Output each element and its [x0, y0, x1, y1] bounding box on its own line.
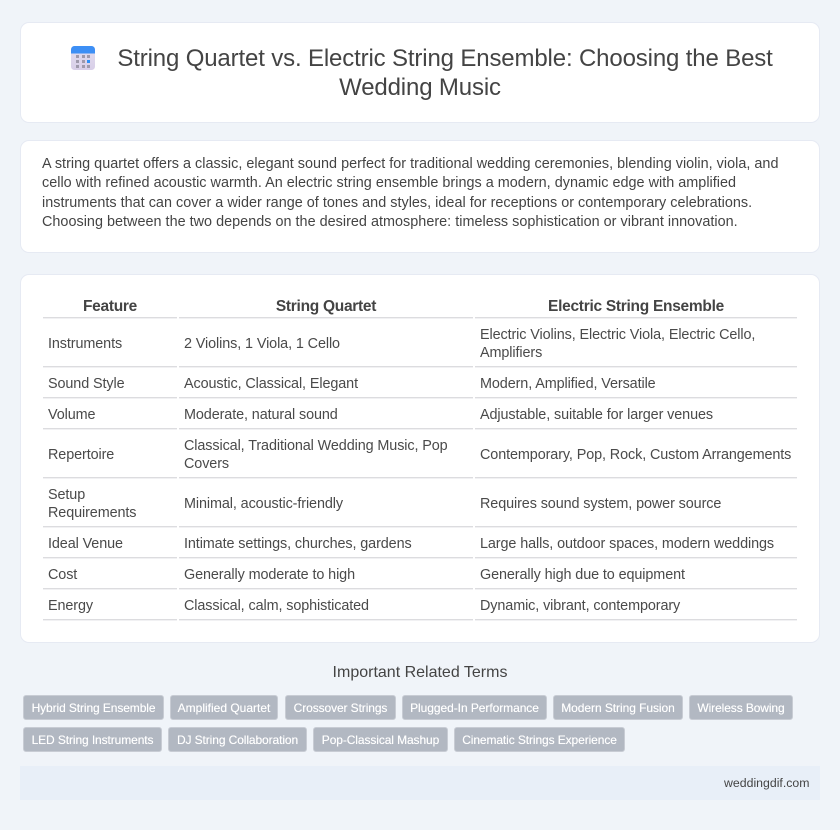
- table rows: Setup: [48, 487, 85, 503]
- table header: Feature: [83, 298, 137, 315]
- panel: comparison table: [20, 274, 820, 643]
- table rows: Covers: [184, 456, 229, 472]
- heading: related terms: Important Related Terms: [333, 664, 507, 681]
- table rows: [43, 317, 797, 621]
- table rows: Generally high due to equipment: [480, 567, 685, 583]
- panel: introduction: [20, 140, 820, 253]
- table rows: Large halls, outdoor spaces, modern weddings: [480, 536, 774, 552]
- tags: related terms: Plugged-In Performance: [410, 701, 539, 715]
- tags: related terms: Hybrid String Ensemble: [32, 701, 155, 715]
- tags: related terms: Cinematic Strings Experience: [462, 733, 617, 747]
- table rows: Requirements: [48, 505, 136, 521]
- table rows: Instruments: [48, 336, 122, 352]
- panel: header: [20, 22, 820, 123]
- footer: [20, 766, 820, 800]
- table rows: Ideal Venue: [48, 536, 123, 552]
- table header: [83, 298, 724, 315]
- tags: related terms: Crossover Strings: [294, 701, 387, 715]
- table rows: Cost: [48, 567, 77, 583]
- table rows: Amplifiers: [480, 345, 542, 361]
- text block: introduction: A string quartet offers a classic, elegant sound perfect for traditional wedding ceremonies, blending violin, viola, and: [42, 156, 778, 172]
- table rows: 2 Violins, 1 Viola, 1 Cello: [184, 336, 340, 352]
- text block: introduction: [42, 156, 778, 230]
- table rows: Modern, Amplified, Versatile: [480, 376, 656, 392]
- table rows: Requires sound system, power source: [480, 496, 721, 512]
- table rows: Intimate settings, churches, gardens: [184, 536, 412, 552]
- footer: source: weddingdif.com: [724, 776, 810, 790]
- table rows: Moderate, natural sound: [184, 407, 338, 423]
- table rows: Electric Violins, Electric Viola, Electric Cello,: [480, 327, 755, 343]
- table rows: Contemporary, Pop, Rock, Custom Arrangements: [480, 447, 791, 463]
- text block: introduction: instruments that can cover a wider range of tones and styles, ideal for receptions or contemporary celebrations.: [42, 195, 752, 211]
- tags: related terms: LED String Instruments: [32, 733, 153, 747]
- tags: related terms: DJ String Collaboration: [177, 733, 298, 747]
- table rows: Minimal, acoustic-friendly: [184, 496, 343, 512]
- table rows: Sound Style: [48, 376, 125, 392]
- table rows: Generally moderate to high: [184, 567, 355, 583]
- table header: Electric String Ensemble: [548, 298, 724, 315]
- text block: introduction: Choosing between the two depends on the desired atmosphere: timeless sophistication or vibrant innovation.: [42, 214, 738, 230]
- table rows: Repertoire: [48, 447, 114, 463]
- tags: related terms: Modern String Fusion: [561, 701, 675, 715]
- title: String Quartet vs. Electric String Ensemble: Choosing the Best: [117, 45, 773, 72]
- table rows: Dynamic, vibrant, contemporary: [480, 598, 680, 614]
- tags: related terms: [23, 695, 793, 752]
- table rows: Volume: [48, 407, 95, 423]
- tags: related terms: Pop-Classical Mashup: [322, 733, 439, 747]
- table rows: Energy: [48, 598, 93, 614]
- table rows: Acoustic, Classical, Elegant: [184, 376, 358, 392]
- icon: calendar: [71, 46, 95, 70]
- text block: introduction: cello with refined acoustic warmth. An electric string ensemble brings a modern, dynamic edge with amplified: [42, 175, 736, 191]
- table rows: Adjustable, suitable for larger venues: [480, 407, 713, 423]
- table header: String Quartet: [276, 298, 376, 315]
- tags: related terms: Wireless Bowing: [697, 701, 785, 715]
- tags: related terms: Amplified Quartet: [178, 701, 270, 715]
- table rows: Classical, calm, sophisticated: [184, 598, 369, 614]
- table rows: Classical, Traditional Wedding Music, Pop: [184, 438, 448, 454]
- title: [117, 45, 773, 101]
- title: Wedding Music: [339, 74, 501, 101]
